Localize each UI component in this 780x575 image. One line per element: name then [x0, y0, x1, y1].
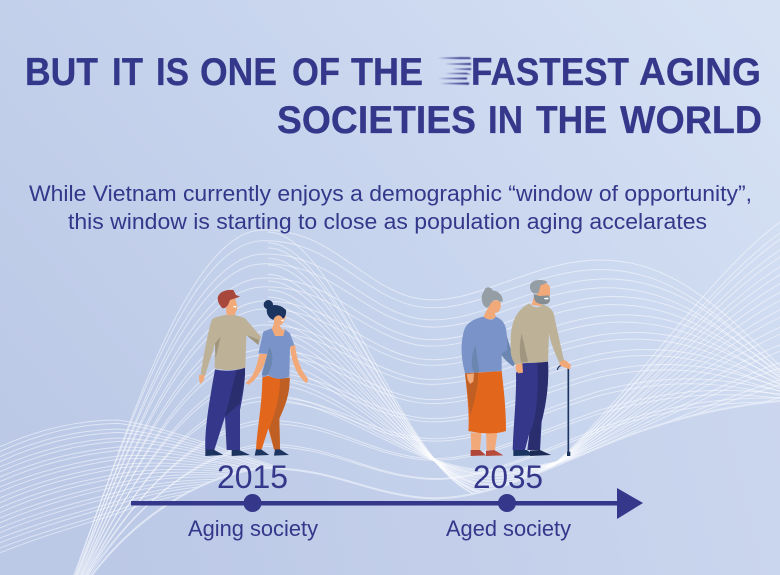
lower background area: [74, 400, 780, 575]
caption: aging society: Aging society: [188, 516, 318, 541]
title: ONE: [200, 51, 277, 94]
marker: 2015: [244, 494, 262, 512]
body text second line: this window is starting to close as population aging accelarates: [68, 209, 707, 234]
illustration: elderly couple: [462, 280, 571, 456]
title second line: SOCIETIES: [277, 99, 476, 142]
title: IS: [156, 51, 189, 94]
title second line: THE: [536, 99, 607, 142]
emphasized word: fastest: FASTEST: [471, 51, 629, 94]
title: THE: [351, 51, 423, 94]
timeline: [131, 459, 643, 541]
title: IT: [112, 51, 143, 94]
marker: 2035: [498, 494, 516, 512]
title: OF: [292, 51, 340, 94]
title word: aging: AGING: [639, 51, 761, 94]
title second line: [277, 99, 762, 142]
year label 2015: 2015: [217, 459, 288, 495]
timeline arrow: [131, 488, 643, 519]
title second line: WORLD: [620, 99, 762, 142]
body text: While Vietnam currently enjoys a demographic “window of opportunity”,: [29, 181, 752, 206]
caption: aged society: Aged society: [446, 516, 571, 541]
illustration: young couple: [199, 290, 308, 456]
body text: [29, 181, 752, 234]
title: [25, 51, 762, 142]
icon: speed lines: [438, 57, 471, 85]
title: BUT: [25, 51, 98, 94]
decorative wave lines: [0, 215, 780, 575]
title second line: IN: [488, 99, 523, 142]
year label 2035: 2035: [473, 459, 543, 495]
